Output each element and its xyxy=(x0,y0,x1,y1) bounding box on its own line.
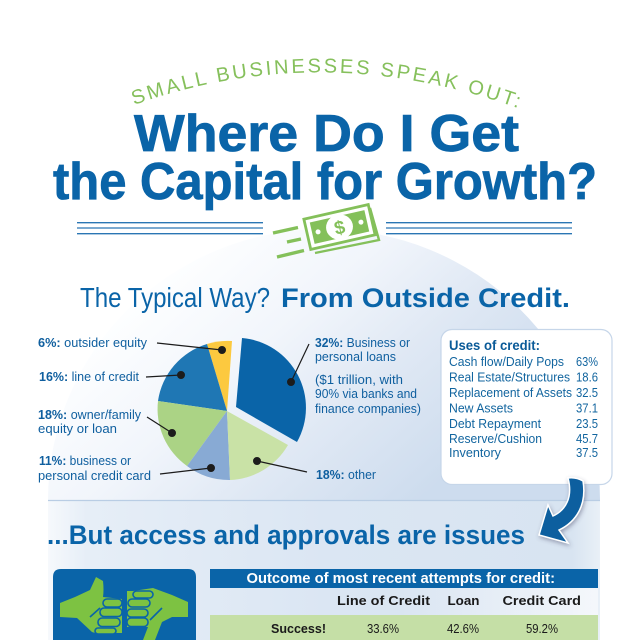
pie labels right: 18%: other xyxy=(316,468,376,482)
panel: credit outcomes table xyxy=(210,569,598,640)
background arch xyxy=(48,229,600,640)
panel: uses of credit: 23.5 xyxy=(576,416,598,431)
panel: thumbs icon xyxy=(53,569,196,640)
panel: credit outcomes table: Outcome of most recent attempts for credit: xyxy=(246,571,555,587)
icon: thumbs up and down xyxy=(60,577,188,640)
pie labels right: finance companies) xyxy=(315,402,421,416)
panel: credit outcomes table: Loan xyxy=(448,593,480,608)
panel: credit outcomes table: 33.6% xyxy=(367,622,399,636)
pie labels left xyxy=(38,336,151,483)
pie leader lines xyxy=(146,343,309,474)
title: the Capital for Growth? xyxy=(53,153,597,211)
panel: uses of credit: 37.1 xyxy=(576,400,598,416)
panel: credit outcomes table: Credit Card xyxy=(502,593,581,608)
pie labels left: 6%: outsider equity xyxy=(38,336,148,350)
pie labels right: 90% via banks and xyxy=(315,387,417,401)
pie labels right: ($1 trillion, with xyxy=(315,373,403,387)
title xyxy=(53,105,597,211)
pie labels right xyxy=(315,336,421,482)
section heading: typical way xyxy=(80,282,570,313)
panel: uses of credit xyxy=(441,330,612,484)
panel: credit outcomes table: Line of Credit xyxy=(337,593,431,608)
icon: flying dollar bill xyxy=(273,205,379,257)
panel: uses of credit: 63% xyxy=(576,354,598,369)
panel: uses of credit: Replacement of Assets xyxy=(449,385,572,400)
panel: uses of credit: Cash flow/Daily Pops xyxy=(449,354,564,369)
curved subtitle: SMALL BUSINESSES SPEAK OUT: xyxy=(132,58,520,108)
pie labels left: 16%: line of credit xyxy=(39,370,140,384)
pie labels left: equity or loan xyxy=(38,422,117,436)
panel: uses of credit: Real Estate/Structures xyxy=(449,370,570,384)
panel: uses of credit: 18.6 xyxy=(576,370,598,384)
panel: credit outcomes table: 59.2% xyxy=(526,622,558,636)
pie labels left: 11%: business or xyxy=(39,454,131,468)
panel: uses of credit: 32.5 xyxy=(576,385,598,400)
icon: flying dollar bill: $ xyxy=(332,217,348,240)
panel: uses of credit: Uses of credit: xyxy=(449,338,540,353)
panel: uses of credit: 45.7 xyxy=(576,431,598,446)
arrow xyxy=(539,478,584,543)
panel: uses of credit: Reserve/Cushion xyxy=(449,431,542,446)
panel: uses of credit: Debt Repayment xyxy=(449,416,541,431)
panel: credit outcomes table: 42.6% xyxy=(447,622,479,636)
pie labels left: 18%: owner/family xyxy=(38,408,142,422)
title: Where Do I Get xyxy=(134,105,519,163)
pie labels right: personal loans xyxy=(315,350,396,364)
pie labels left: personal credit card xyxy=(38,469,151,483)
panel: uses of credit: 37.5 xyxy=(576,445,598,460)
section heading: typical way: From Outside Credit. xyxy=(281,283,570,313)
section heading: access and approvals: ...But access and approvals are issues xyxy=(47,520,525,550)
title rules xyxy=(77,223,572,234)
pie chart xyxy=(158,338,306,480)
pie labels right: 32%: Business or xyxy=(315,336,410,350)
section divider xyxy=(48,500,600,502)
panel: uses of credit: New Assets xyxy=(449,400,513,416)
panel: uses of credit: Inventory xyxy=(449,445,501,460)
section heading: typical way: The Typical Way? xyxy=(80,282,270,313)
panel: credit outcomes table: Success! xyxy=(271,621,326,636)
